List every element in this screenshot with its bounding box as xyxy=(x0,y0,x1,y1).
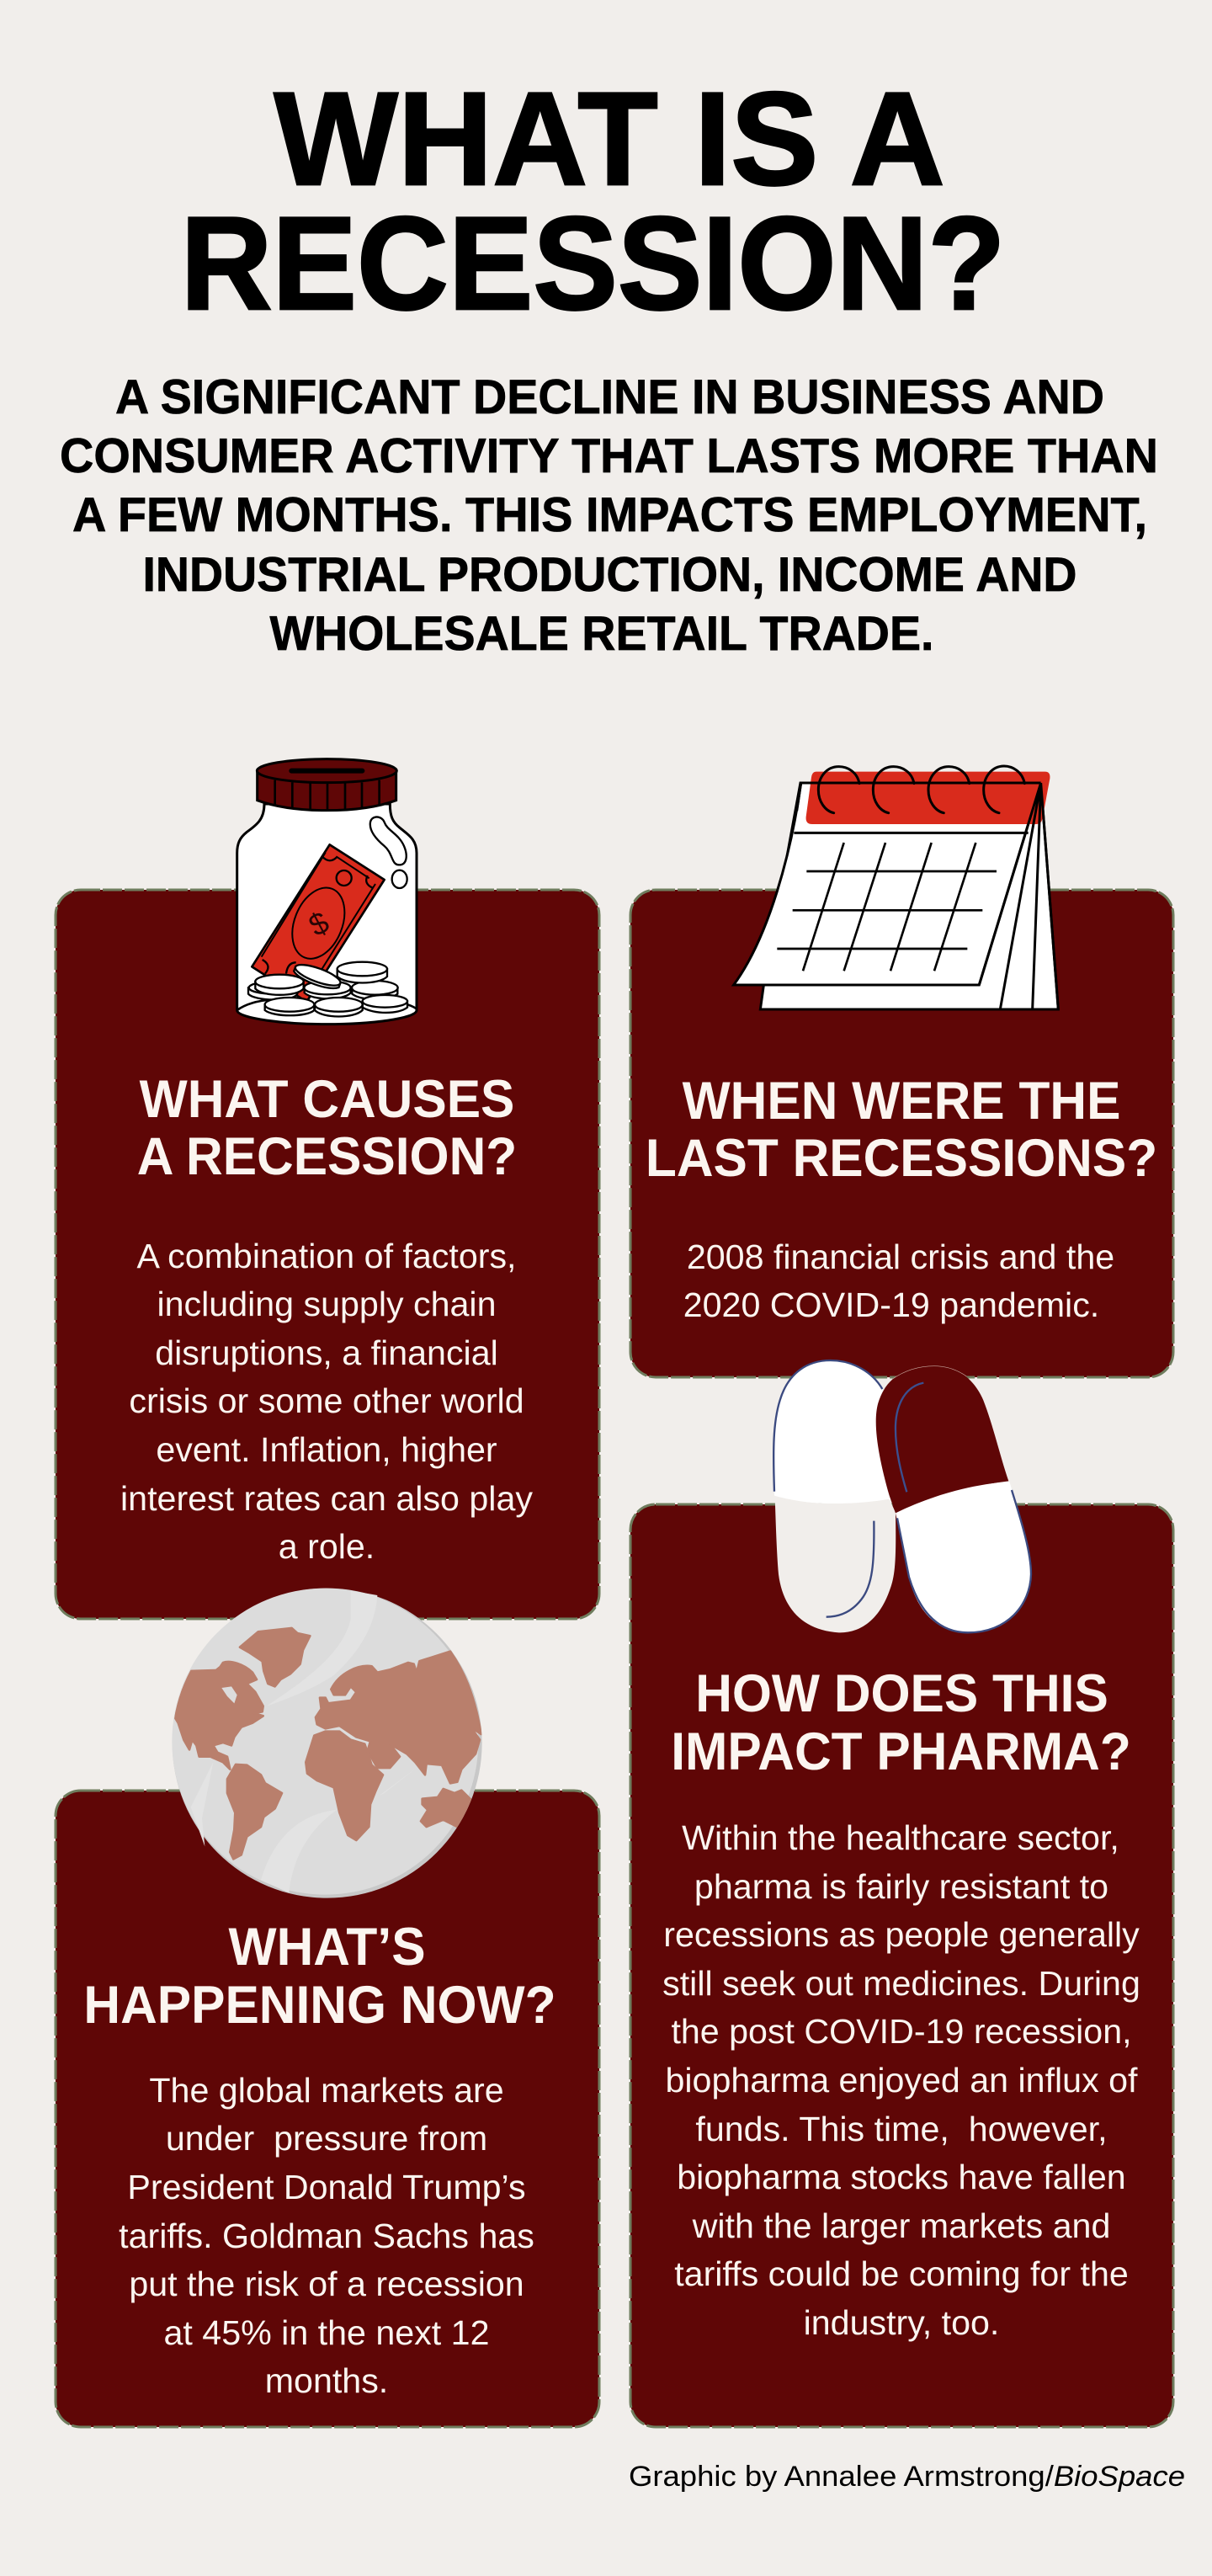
text block: pharma impact: Within the healthcare sector, xyxy=(682,1818,1119,1857)
title: RECESSION? xyxy=(180,189,1005,338)
text block: pharma impact: still seek out medicines. During xyxy=(662,1964,1140,2003)
subtitle: definition of a recession: A SIGNIFICANT DECLINE IN BUSINESS AND xyxy=(115,370,1104,424)
heading: what's happening now xyxy=(83,1918,556,2035)
text block: pharma impact: tariffs could be coming for the xyxy=(674,2254,1129,2293)
subtitle: definition of a recession: A FEW MONTHS. THIS IMPACTS EMPLOYMENT, xyxy=(72,488,1147,542)
text block: pharma impact: recessions as people generally xyxy=(663,1915,1140,1954)
text block: current situation xyxy=(119,2071,534,2400)
text block: causes: including supply chain xyxy=(157,1285,497,1323)
text block: pharma impact: the post COVID-19 recession, xyxy=(671,2012,1132,2051)
heading: what causes a recession xyxy=(137,1070,517,1186)
panel: what's happening now xyxy=(56,1791,599,2427)
heading: when were the last recessions: LAST RECESSIONS? xyxy=(646,1129,1157,1188)
icon: globe xyxy=(172,1589,482,1898)
panel: when were the last recessions xyxy=(630,890,1173,1377)
text block: current situation: The global markets are xyxy=(149,2071,504,2110)
text block: causes: disruptions, a financial xyxy=(155,1333,498,1372)
text block: pharma impact: industry, too. xyxy=(804,2303,999,2342)
text block: pharma impact: pharma is fairly resistant to xyxy=(694,1867,1108,1906)
text block: pharma impact: biopharma stocks have fallen xyxy=(677,2158,1126,2196)
subtitle: definition of a recession xyxy=(60,370,1158,661)
heading: what causes a recession: WHAT CAUSES xyxy=(140,1070,514,1129)
text block: last recessions: 2020 COVID-19 pandemic. xyxy=(683,1285,1099,1324)
text block: current situation: under pressure from xyxy=(166,2119,487,2158)
heading: what causes a recession: A RECESSION? xyxy=(137,1127,517,1186)
subtitle: definition of a recession: WHOLESALE RETAIL TRADE. xyxy=(269,607,934,661)
title: WHAT IS A xyxy=(274,65,944,213)
panel: what causes a recession xyxy=(56,890,599,1619)
subtitle: definition of a recession: INDUSTRIAL PRODUCTION, INCOME AND xyxy=(143,548,1077,602)
icon: pill capsules xyxy=(773,1360,1031,1632)
text block: pharma impact: with the larger markets and xyxy=(692,2206,1110,2245)
icon: money jar: $ xyxy=(303,905,334,943)
heading: when were the last recessions: WHEN WERE THE xyxy=(683,1072,1120,1131)
text block: current situation: President Donald Trump’s xyxy=(127,2168,526,2206)
text block: pharma impact xyxy=(662,1818,1140,2342)
text block: current situation: tariffs. Goldman Sachs has xyxy=(119,2217,534,2255)
text block: current situation: put the risk of a recession xyxy=(129,2265,524,2303)
text block: last recessions: 2008 financial crisis and the xyxy=(687,1237,1114,1276)
heading: how does this impact pharma: IMPACT PHARMA? xyxy=(671,1722,1131,1781)
text block: pharma impact: biopharma enjoyed an influx of xyxy=(666,2061,1138,2100)
icon: money jar xyxy=(237,759,417,1025)
text block: causes: A combination of factors, xyxy=(136,1237,517,1275)
heading: how does this impact pharma: HOW DOES THIS xyxy=(695,1664,1108,1723)
title xyxy=(180,65,1005,338)
icon: desk calendar xyxy=(734,766,1058,1009)
heading: what's happening now: WHAT’S xyxy=(228,1918,426,1977)
text block: causes: interest rates can also play xyxy=(120,1479,533,1518)
subtitle: definition of a recession: CONSUMER ACTIVITY THAT LASTS MORE THAN xyxy=(60,429,1158,483)
text block: current situation: months. xyxy=(265,2361,388,2400)
text block: causes: event. Inflation, higher xyxy=(156,1430,497,1469)
text block: causes: crisis or some other world xyxy=(129,1381,524,1420)
text block: causes: a role. xyxy=(279,1527,375,1566)
panel: how does this impact pharma xyxy=(630,1504,1173,2427)
text block: last recessions xyxy=(683,1237,1114,1324)
heading: when were the last recessions xyxy=(646,1072,1157,1188)
heading: how does this impact pharma xyxy=(671,1664,1131,1781)
text block: pharma impact: funds. This time, however, xyxy=(695,2110,1108,2148)
text block: current situation: at 45% in the next 12 xyxy=(164,2313,489,2352)
text block: causes xyxy=(120,1237,533,1566)
credit line: Graphic by Annalee Armstrong/ BioSpace xyxy=(629,2461,1185,2493)
heading: what's happening now: HAPPENING NOW? xyxy=(83,1976,556,2035)
